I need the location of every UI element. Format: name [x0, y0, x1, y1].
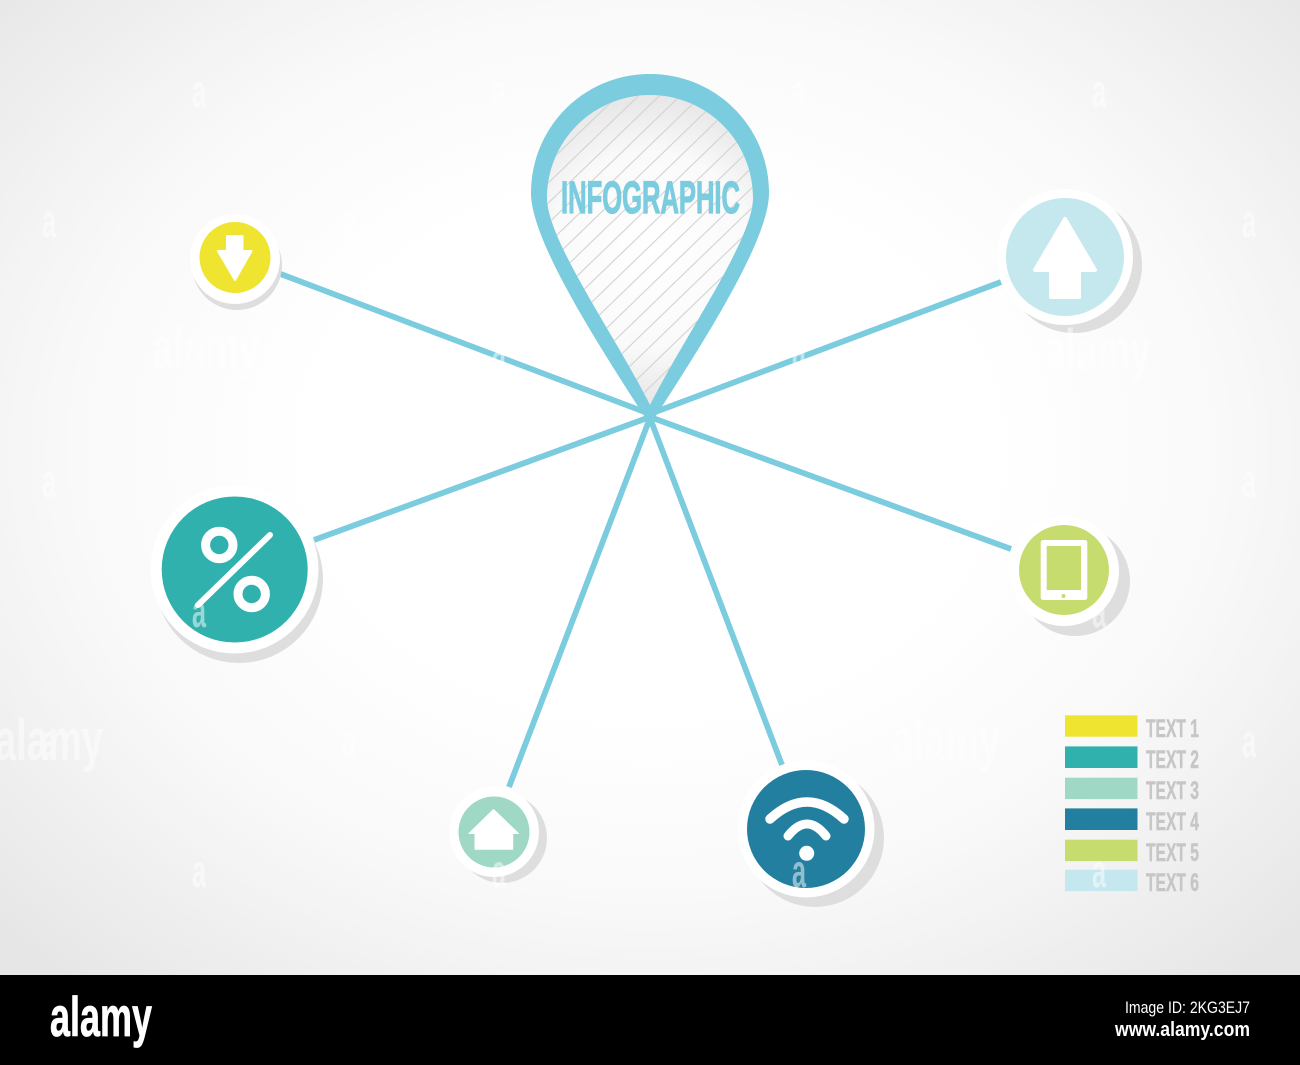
watermarks: a [792, 845, 806, 897]
watermarks: a [342, 195, 356, 247]
icon: tablet [1041, 540, 1087, 600]
watermarks: a [492, 325, 506, 377]
watermarks: a [1092, 845, 1106, 897]
watermarks: a [792, 585, 806, 637]
pin title: INFOGRAPHIC [561, 172, 740, 223]
legend: TEXT 4 [1146, 808, 1199, 836]
legend [1065, 715, 1199, 897]
watermarks: alamy [892, 708, 1000, 773]
node: percent [150, 486, 323, 663]
watermarks: a [792, 325, 806, 377]
node: upload arrow [997, 189, 1142, 333]
watermarks: alamy [152, 316, 260, 381]
node: tablet [1009, 516, 1130, 636]
watermarks: a [192, 845, 206, 897]
legend: TEXT 3 [1146, 777, 1199, 805]
legend: TEXT 1 [1146, 715, 1199, 743]
watermarks: alamy [1044, 318, 1151, 383]
watermarks: a [642, 455, 656, 507]
central location pin [531, 74, 769, 425]
watermarks: a [642, 715, 656, 767]
watermarks: a [1242, 715, 1256, 767]
watermarks [0, 65, 1256, 897]
watermarks: a [1242, 195, 1256, 247]
watermarks: a [192, 585, 206, 637]
watermarks: a [1092, 65, 1106, 117]
watermarks: a [492, 845, 506, 897]
watermarks: a [342, 715, 356, 767]
connector lines [278, 273, 1011, 787]
node: wifi [738, 760, 884, 907]
watermarks: a [42, 195, 56, 247]
icon: up arrow [1035, 219, 1095, 297]
legend: TEXT 6 [1146, 869, 1199, 897]
watermarks: a [42, 455, 56, 507]
watermarks: a [192, 65, 206, 117]
watermarks: a [792, 65, 806, 117]
watermarks: a [342, 455, 356, 507]
footer logo: alamy [50, 985, 152, 1048]
watermarks: a [492, 585, 506, 637]
watermarks: a [492, 65, 506, 117]
icon: wifi signal [770, 802, 844, 861]
node: home [449, 787, 547, 883]
watermarks: a [1092, 585, 1106, 637]
legend: TEXT 5 [1146, 839, 1199, 867]
icon: percent sign [198, 531, 270, 608]
footer bar [0, 975, 1300, 1065]
legend: TEXT 2 [1146, 746, 1199, 774]
node: download arrow [190, 214, 282, 310]
image id: Image ID: 2KG3EJ7 [1125, 998, 1250, 1017]
icon: house [469, 810, 518, 849]
watermarks: a [42, 715, 56, 767]
website: www.alamy.com [1114, 1019, 1250, 1041]
icon: down arrow [218, 236, 252, 280]
watermarks: a [1242, 455, 1256, 507]
watermarks: a [942, 455, 956, 507]
